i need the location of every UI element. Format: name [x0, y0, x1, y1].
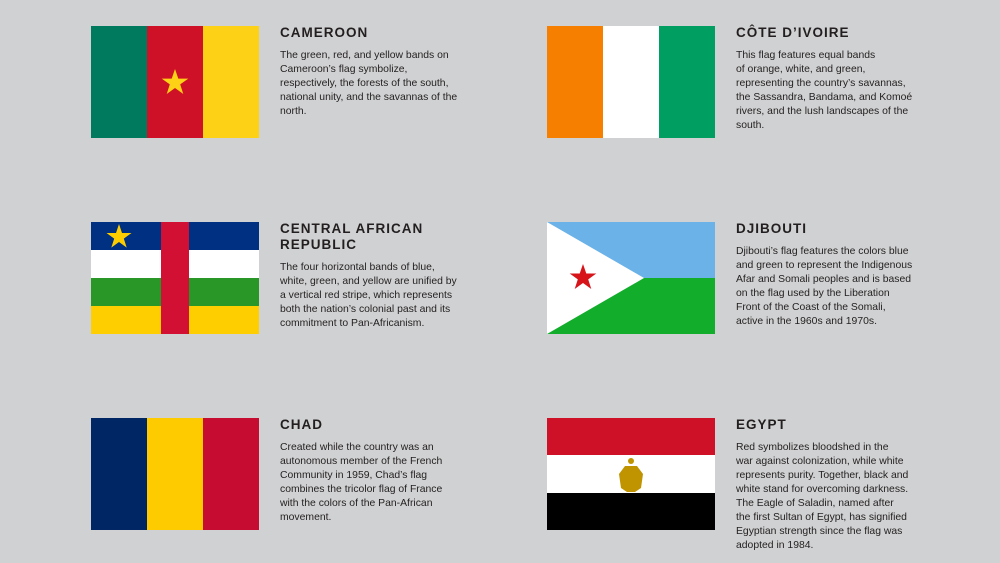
- text: Central African Republic: commitment to Pan-Africanism.: [280, 318, 424, 329]
- text: Egypt: The Eagle of Saladin, named after: [736, 498, 894, 509]
- text: Chad: CHAD: [280, 417, 323, 432]
- text: Egypt: adopted in 1984.: [736, 540, 813, 551]
- text: Chad: combines the tricolor flag of France: [280, 484, 442, 495]
- text: Djibouti: DJIBOUTI: [736, 221, 807, 236]
- text: Cote d'Ivoire: the Sassandra, Bandama, and Komoé: [736, 92, 912, 103]
- text: Cameroon: respectively, the forests of the south,: [280, 78, 448, 89]
- text: Cote d'Ivoire: south.: [736, 120, 764, 131]
- text: Chad: [280, 417, 442, 523]
- text: Cote d'Ivoire: This flag features equal bands: [736, 50, 875, 61]
- text: Chad: movement.: [280, 512, 331, 523]
- text: Cameroon: The green, red, and yellow bands on: [280, 50, 449, 61]
- text: Djibouti: and green to represent the Indigenous: [736, 260, 912, 271]
- text: Central African Republic: a vertical red stripe, which represents: [280, 290, 452, 301]
- text: Djibouti: [736, 221, 912, 327]
- text: Egypt: the first Sultan of Egypt, has signified: [736, 512, 907, 523]
- text: Chad: autonomous member of the French: [280, 456, 442, 467]
- text: Cameroon: CAMEROON: [280, 25, 368, 40]
- text: Cameroon: national unity, and the savannas of the: [280, 92, 457, 103]
- text: Egypt: Egyptian strength since the flag was: [736, 526, 902, 537]
- text: Central African Republic: [280, 221, 457, 329]
- text: Egypt: white stand for overcoming darkness.: [736, 484, 908, 495]
- text: Cameroon: [280, 25, 457, 117]
- text: Egypt: [736, 417, 908, 551]
- text: Egypt: represents purity. Together, black and: [736, 470, 908, 481]
- text: Djibouti: Djibouti’s flag features the colors blue: [736, 246, 909, 257]
- text: Djibouti: Front of the Coast of the Somali,: [736, 302, 886, 313]
- text: Cameroon: Cameroon’s flag symbolize,: [280, 64, 407, 75]
- text: Cameroon: north.: [280, 106, 307, 117]
- flag: Cote d'Ivoire: [547, 26, 715, 138]
- flag: Chad: [91, 418, 259, 530]
- text: Cote d'Ivoire: CÔTE D’IVOIRE: [736, 25, 850, 40]
- text: Chad: Community in 1959, Chad’s flag: [280, 470, 427, 481]
- text: Egypt: Red symbolizes bloodshed in the: [736, 442, 888, 453]
- flag: Egypt: [547, 418, 715, 530]
- text: Djibouti: active in the 1960s and 1970s.: [736, 316, 877, 327]
- text: Central African Republic: white, green, and yellow are unified by: [280, 276, 457, 287]
- flag: Djibouti: [547, 222, 715, 334]
- text: Chad: Created while the country was an: [280, 442, 434, 453]
- text: Djibouti: Afar and Somali peoples and is based: [736, 274, 911, 285]
- text: Cote d'Ivoire: rivers, and the lush landscapes of the: [736, 106, 908, 117]
- text: Central African Republic: both the nation’s colonial past and its: [280, 304, 450, 315]
- text: Chad: with the colors of the Pan-African: [280, 498, 432, 509]
- text: Cote d'Ivoire: of orange, white, and green,: [736, 64, 865, 75]
- text: Djibouti: on the flag used by the Liberation: [736, 288, 890, 299]
- text: Central African Republic: The four horizontal bands of blue,: [280, 262, 435, 273]
- text: Cote d'Ivoire: representing the country’s savannas,: [736, 78, 906, 89]
- text: Cote d'Ivoire: [736, 24, 912, 131]
- text: Egypt: war against colonization, while white: [736, 456, 904, 467]
- text: Central African Republic: REPUBLIC: [280, 237, 357, 252]
- flag: Central African Republic: [91, 222, 259, 334]
- flag: Cameroon: [91, 26, 259, 138]
- text: Central African Republic: CENTRAL AFRICAN: [280, 221, 423, 236]
- text: Egypt: EGYPT: [736, 417, 787, 432]
